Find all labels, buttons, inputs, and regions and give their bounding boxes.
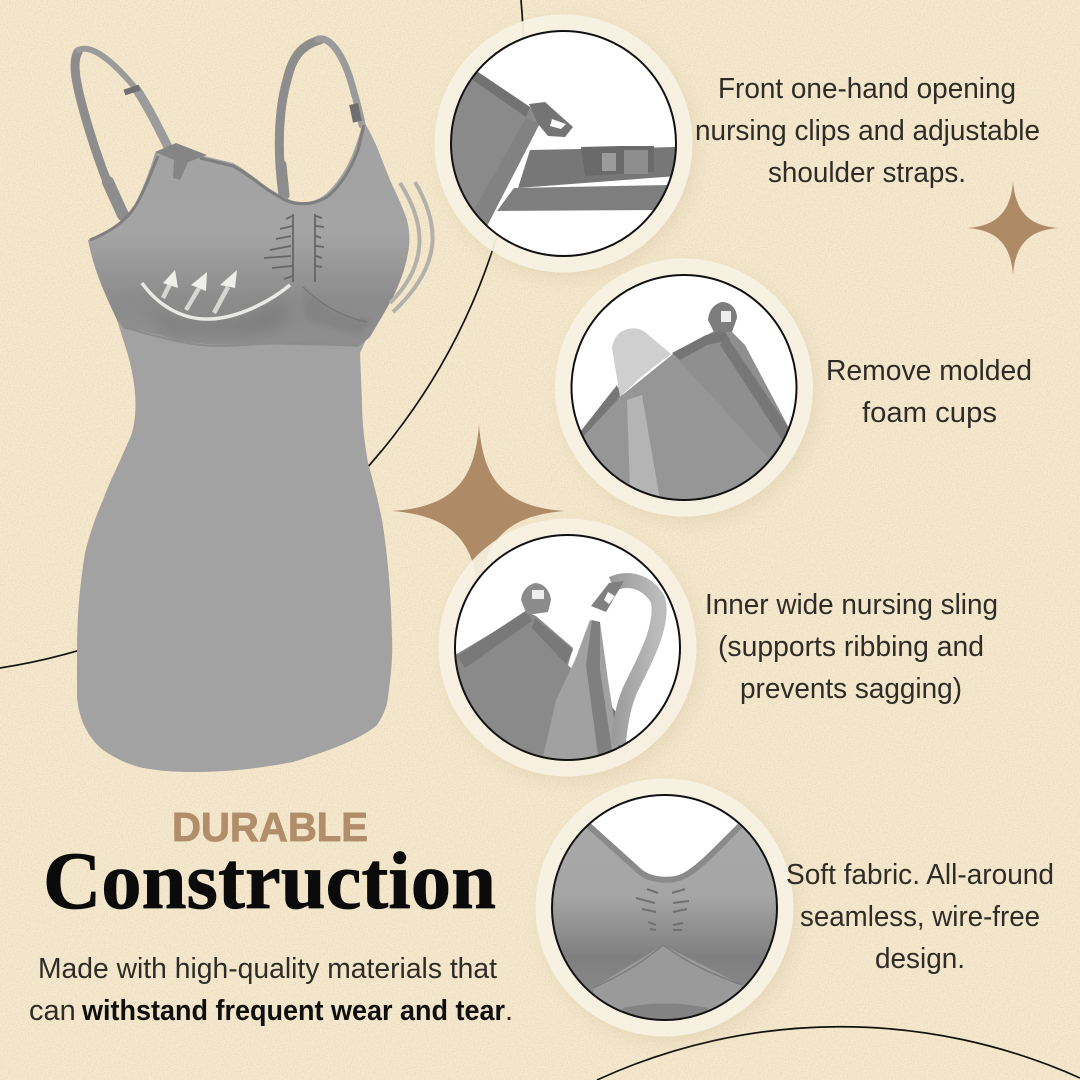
text block: description [29,953,513,1027]
text block: description: . [505,995,513,1027]
centre ruching [264,214,324,282]
front straps [78,39,362,155]
detail circle 4: seamless fabric [536,778,797,1042]
icon: small sparkle star [967,181,1059,275]
clip collar [155,143,207,180]
heading: construction: Construction [43,835,496,926]
text: clips and straps caption: Front one-hand opening [718,73,1016,105]
text: soft fabric caption: seamless, wire-free [800,901,1040,933]
text: clips and straps caption: shoulder straps. [768,157,966,189]
text: nursing sling caption: (supports ribbing and [718,631,984,663]
text: nursing sling caption [705,589,998,705]
text: soft fabric caption: Soft fabric. All-around [786,859,1054,891]
strap clips [123,85,362,123]
text: clips and straps caption: nursing clips and adjustable [695,115,1040,147]
back straps [75,40,320,215]
bust section [88,120,409,347]
bust shading and under-band [123,287,372,346]
text: foam cups caption [826,355,1032,429]
lower dress body [77,320,392,772]
neckline trim [90,125,364,240]
text: foam cups caption: Remove molded [826,355,1032,387]
text: clips and straps caption [695,73,1040,189]
icon: large sparkle star [392,425,565,597]
text: soft fabric caption: design. [875,943,965,975]
motion arcs beside bust [390,182,433,312]
text block: description: withstand frequent wear and tear [81,995,505,1027]
product: grey nursing camisole [75,39,433,772]
text: nursing sling caption: Inner wide nursing sling [705,589,998,621]
text: foam cups caption: foam cups [862,397,997,429]
detail circle 1: nursing clip and strap [430,14,696,278]
support curve and lift arrows [142,270,290,319]
text: soft fabric caption [786,859,1054,975]
detail circle 3: inner nursing sling [438,518,700,782]
text: nursing sling caption: prevents sagging) [740,673,962,705]
text block: description: Made with high-quality materials that [38,953,497,985]
heading: durable: DURABLE [172,804,368,850]
detail circle 2: removable foam cup [555,258,817,522]
text block: description: can [29,995,76,1027]
